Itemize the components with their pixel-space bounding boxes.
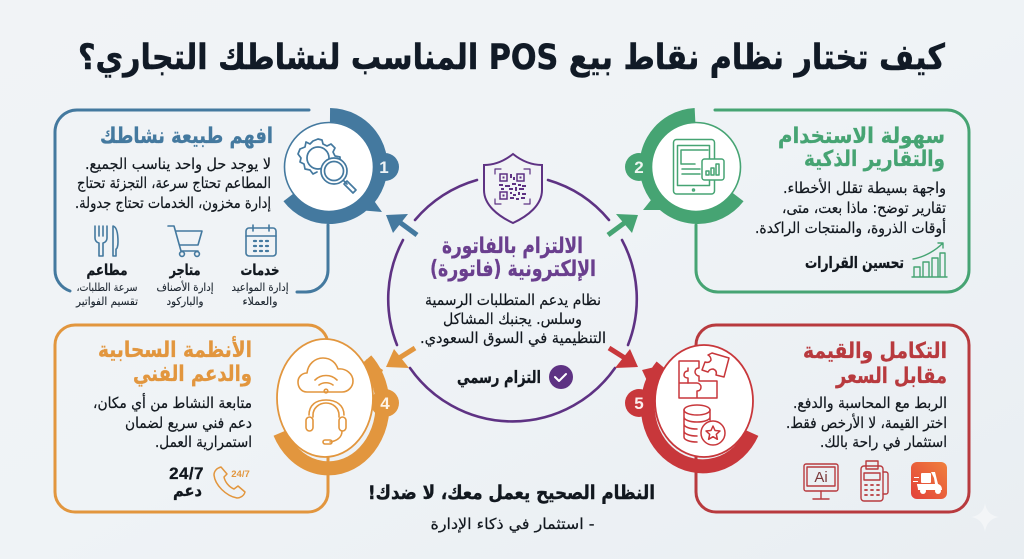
support label bbox=[169, 464, 204, 500]
label: better decisions: تحسين القرارات bbox=[805, 253, 904, 272]
step badge 1 bbox=[284, 115, 399, 217]
icon: AI monitor: Ai bbox=[814, 469, 828, 486]
panel: integration and value bbox=[625, 325, 969, 512]
body text: الربط مع المحاسبة والدفع. bbox=[793, 394, 947, 412]
arrow: to step 4 bbox=[386, 348, 415, 368]
body text bbox=[755, 178, 946, 237]
arrow: to step 2 bbox=[608, 214, 638, 235]
body text: اختر القيمة، لا الأرخص فقط. bbox=[786, 413, 947, 432]
stores label bbox=[156, 261, 214, 308]
services label: والعملاء bbox=[242, 295, 278, 308]
icon: gear and magnifier bbox=[298, 139, 356, 193]
icon: phone 24/7 bbox=[214, 467, 250, 498]
icon: cloud wifi bbox=[298, 358, 353, 393]
heading: الأنظمة السحابية bbox=[98, 335, 252, 363]
official compliance badge: التزام رسمي bbox=[457, 368, 541, 388]
closing statement: النظام الصحيح يعمل معك، لا ضدك! bbox=[368, 482, 655, 504]
icon: AI monitor bbox=[804, 464, 838, 499]
body text: التنظيمية في السوق السعودي. bbox=[420, 329, 606, 348]
icon: phone 24/7: 24/7 bbox=[231, 469, 250, 480]
arrow: to step 5 bbox=[609, 348, 638, 368]
sparkle mark bbox=[971, 503, 999, 532]
services label: خدمات bbox=[240, 261, 280, 279]
restaurants label bbox=[75, 261, 138, 308]
support label: 24/7 bbox=[169, 464, 204, 483]
icon: headset bbox=[306, 400, 346, 444]
icon: puzzle bbox=[679, 353, 729, 398]
body text: واجهة بسيطة تقلل الأخطاء. bbox=[783, 178, 946, 197]
heading: مقابل السعر bbox=[835, 364, 947, 389]
panel: ease of use and smart reports bbox=[625, 110, 969, 292]
heading bbox=[430, 234, 596, 282]
support label: دعم bbox=[173, 481, 202, 500]
heading: التكامل والقيمة bbox=[803, 339, 947, 364]
heading: سهولة الاستخدام bbox=[778, 124, 945, 149]
body text: المطاعم تحتاج سرعة، التجزئة تحتاج bbox=[77, 174, 271, 193]
title: كيف تختار نظام نقاط بيع POS المناسب لنشاطك التجاري؟ bbox=[78, 38, 946, 78]
step badge 1: 1 bbox=[379, 158, 389, 177]
heading: افهم طبيعة نشاطك bbox=[100, 124, 273, 149]
icon: cart bbox=[168, 226, 202, 256]
body text: استمرارية العمل. bbox=[155, 433, 252, 451]
services label: إدارة المواعيد bbox=[232, 281, 288, 294]
body text: تقارير توضح: ماذا بعت، متى، bbox=[782, 199, 946, 217]
stores label: متاجر bbox=[169, 261, 200, 279]
icon: calendar bbox=[246, 225, 276, 256]
step badge 5: 5 bbox=[634, 394, 644, 413]
body text: نظام يدعم المتطلبات الرسمية bbox=[425, 291, 601, 309]
heading bbox=[98, 335, 252, 387]
icon: growth chart bbox=[912, 243, 947, 277]
panel: cloud and support bbox=[55, 325, 399, 512]
center ring bbox=[388, 180, 637, 421]
body text: إدارة مخزون، الخدمات تحتاج جدولة. bbox=[75, 194, 271, 213]
restaurants label: تقسيم الفواتير bbox=[75, 295, 138, 308]
heading: الالتزام بالفاتورة bbox=[442, 234, 583, 259]
closing statement bbox=[368, 482, 655, 534]
body text: أوقات الذروة، والمنتجات الراكدة. bbox=[755, 218, 946, 237]
services label bbox=[232, 261, 288, 308]
heading: والتقارير الذكية bbox=[804, 147, 945, 172]
body text: دعم فني سريع لضمان bbox=[125, 414, 252, 433]
body text bbox=[420, 291, 606, 348]
body text: استثمار في راحة بالك. bbox=[820, 433, 947, 452]
stores label: والباركود bbox=[166, 295, 204, 308]
closing statement: - استثمار في ذكاء الإدارة bbox=[430, 515, 594, 534]
body text bbox=[75, 155, 271, 213]
arrow: to step 1 bbox=[386, 214, 417, 235]
icon: card terminal bbox=[861, 461, 888, 501]
body text: لا يوجد حل واحد يناسب الجميع. bbox=[85, 155, 271, 173]
heading: والدعم الفني bbox=[133, 362, 252, 387]
icon: QR shield bbox=[484, 154, 542, 223]
heading: الإلكترونية (فاتورة) bbox=[430, 257, 596, 282]
restaurants label: سرعة الطلبات، bbox=[76, 281, 138, 294]
icon: fork and knife bbox=[95, 226, 118, 256]
body text bbox=[93, 393, 252, 451]
step badge 4: 4 bbox=[380, 394, 390, 413]
step badge 2: 2 bbox=[634, 158, 644, 177]
restaurants label: مطاعم bbox=[86, 261, 128, 279]
icon: tablet with chart bbox=[674, 140, 724, 194]
body text: وسلس. يجنبك المشاكل bbox=[443, 310, 582, 328]
body text bbox=[786, 394, 947, 452]
icon: delivery app bbox=[911, 462, 947, 499]
heading bbox=[778, 124, 945, 172]
step badge 4 bbox=[277, 339, 399, 468]
panel: e-invoicing compliance bbox=[388, 154, 637, 421]
stores label: إدارة الأصناف bbox=[156, 280, 214, 294]
body text: متابعة النشاط من أي مكان، bbox=[93, 393, 252, 413]
heading bbox=[803, 339, 947, 389]
icon: coins with star bbox=[684, 405, 725, 445]
panel: understand your business bbox=[55, 110, 399, 308]
step badge 5 bbox=[625, 345, 753, 466]
step badge 2 bbox=[625, 115, 740, 217]
